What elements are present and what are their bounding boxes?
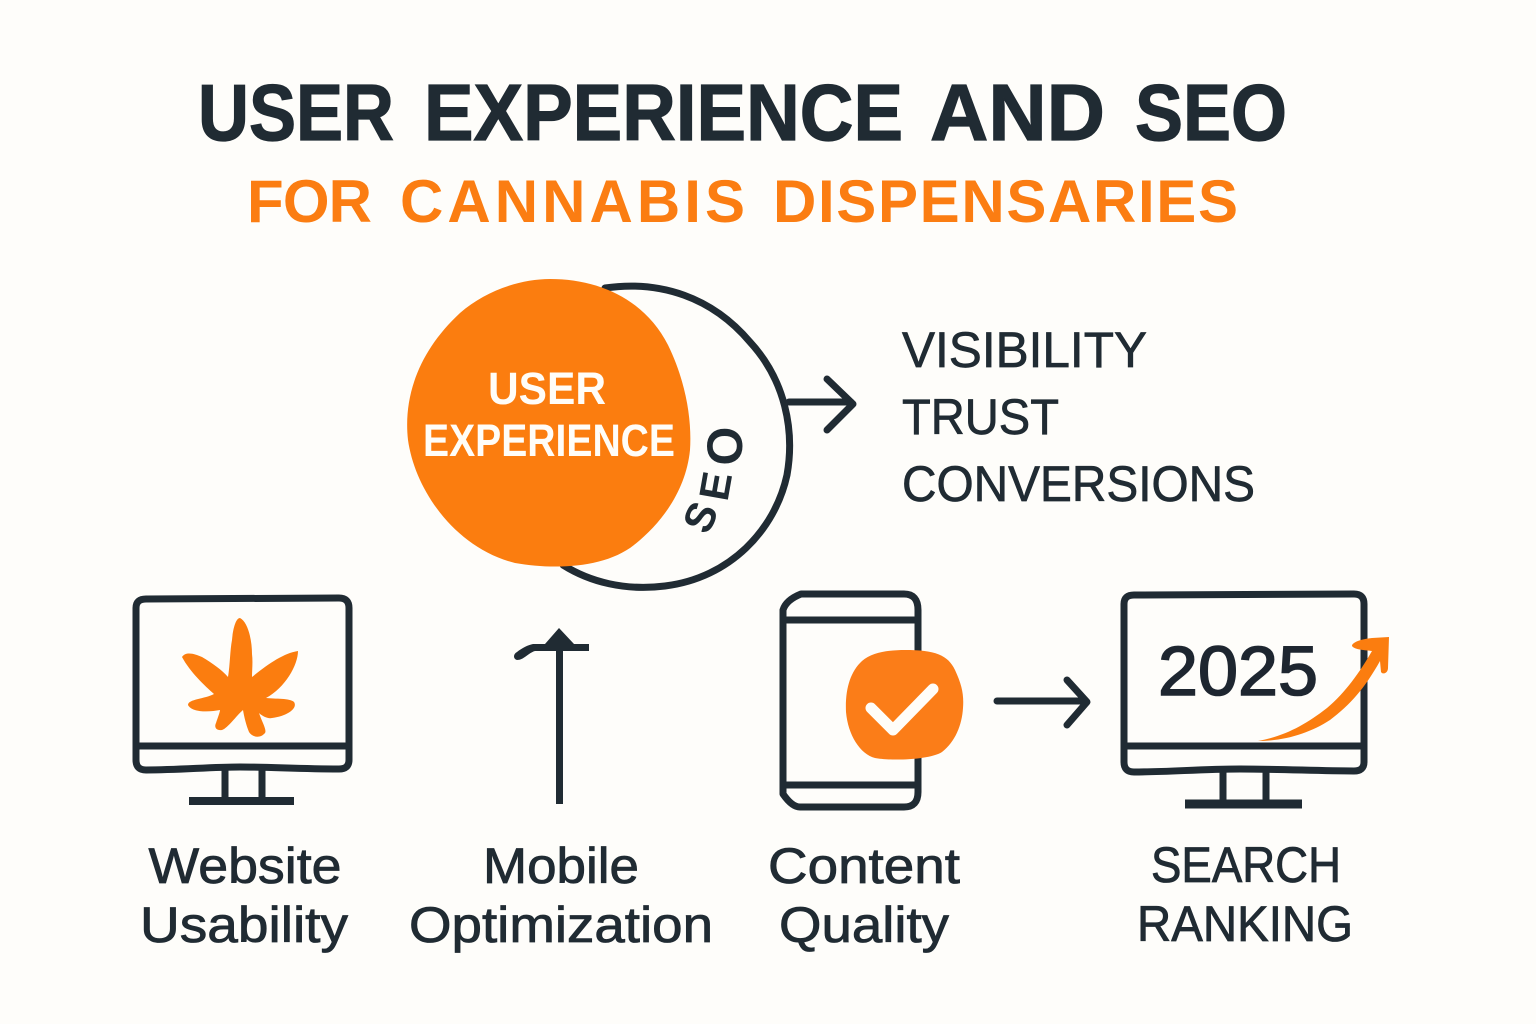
subtitle: DISPENSARIES — [773, 168, 1238, 235]
label: search ranking: RANKING — [1137, 896, 1353, 952]
outcomes list: TRUST — [902, 389, 1059, 445]
label: website usability: Website — [148, 838, 342, 894]
icon: phone with check badge — [783, 594, 963, 807]
cannabis leaf — [182, 618, 298, 737]
arrow: venn to outcomes — [789, 379, 853, 430]
label: mobile optimization: Optimization — [409, 897, 713, 953]
year label: 2025 — [1158, 632, 1318, 710]
label: mobile optimization: Mobile — [483, 838, 639, 894]
subtitle — [247, 168, 1238, 235]
user experience orange blob — [407, 279, 690, 567]
label: content quality: Quality — [779, 897, 949, 953]
subtitle: FOR — [247, 168, 372, 235]
label: mobile optimization — [409, 838, 713, 953]
title: USER — [198, 68, 394, 157]
label: search ranking — [1137, 837, 1353, 952]
user experience label: USER — [488, 363, 606, 414]
icon: up arrow — [514, 628, 589, 804]
icon: monitor with 2025 and growth arrow — [1124, 594, 1389, 804]
outcomes list: VISIBILITY — [902, 322, 1147, 378]
label: website usability — [140, 838, 348, 953]
SEO rotated label: E — [690, 468, 741, 504]
outcomes list — [902, 322, 1255, 512]
icon: monitor with cannabis leaf — [136, 598, 349, 801]
user experience label — [423, 363, 675, 466]
SEO rotated label — [673, 427, 753, 540]
label: search ranking: SEARCH — [1151, 837, 1341, 893]
title: EXPERIENCE — [424, 68, 903, 157]
growth arrow — [1258, 637, 1389, 741]
title: SEO — [1135, 68, 1287, 157]
SEO rotated label: S — [673, 495, 728, 540]
outcomes list: CONVERSIONS — [902, 456, 1255, 512]
user experience label: EXPERIENCE — [423, 415, 675, 466]
subtitle: CANNABIS — [400, 168, 745, 235]
label: content quality: Content — [768, 838, 960, 894]
SEO rotated label: O — [697, 427, 753, 465]
SEO circle outline — [563, 286, 790, 587]
arrow: content to ranking — [997, 680, 1087, 725]
label: website usability: Usability — [140, 897, 348, 953]
title: AND — [930, 68, 1105, 157]
venn diagram: user experience and SEO — [407, 279, 790, 587]
label: content quality — [768, 838, 960, 953]
title — [198, 68, 1287, 157]
